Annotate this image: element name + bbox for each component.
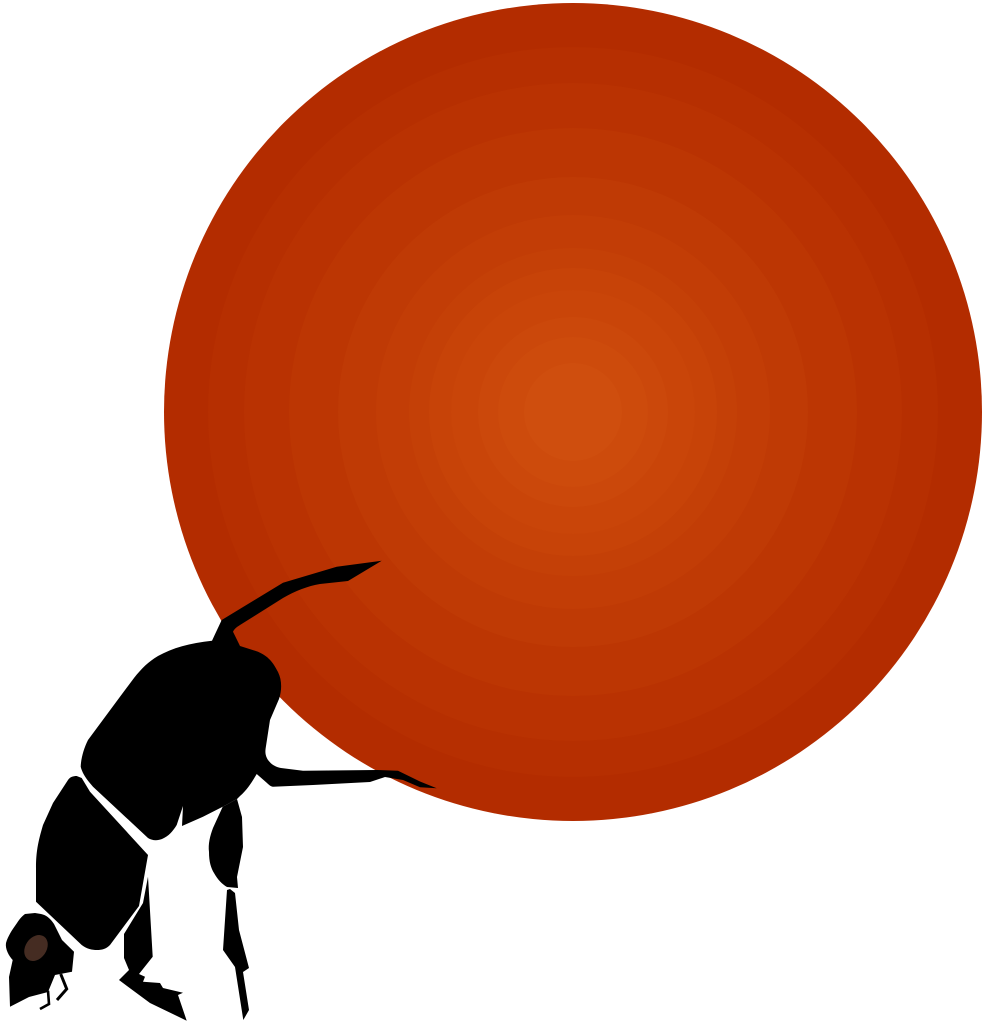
middle leg upper segment [209, 799, 243, 888]
mouthpart feeler left [40, 991, 49, 1009]
front leg [119, 877, 187, 1021]
thorax segment [36, 776, 148, 950]
middle leg lower segment [223, 889, 249, 1020]
eye [19, 931, 53, 965]
dung ball: stepped radial gradient circle [164, 3, 982, 821]
beetle silhouette [6, 561, 437, 1021]
head [6, 913, 74, 1007]
abdomen with rear legs [81, 561, 437, 840]
mouthpart feeler right [57, 974, 67, 1000]
